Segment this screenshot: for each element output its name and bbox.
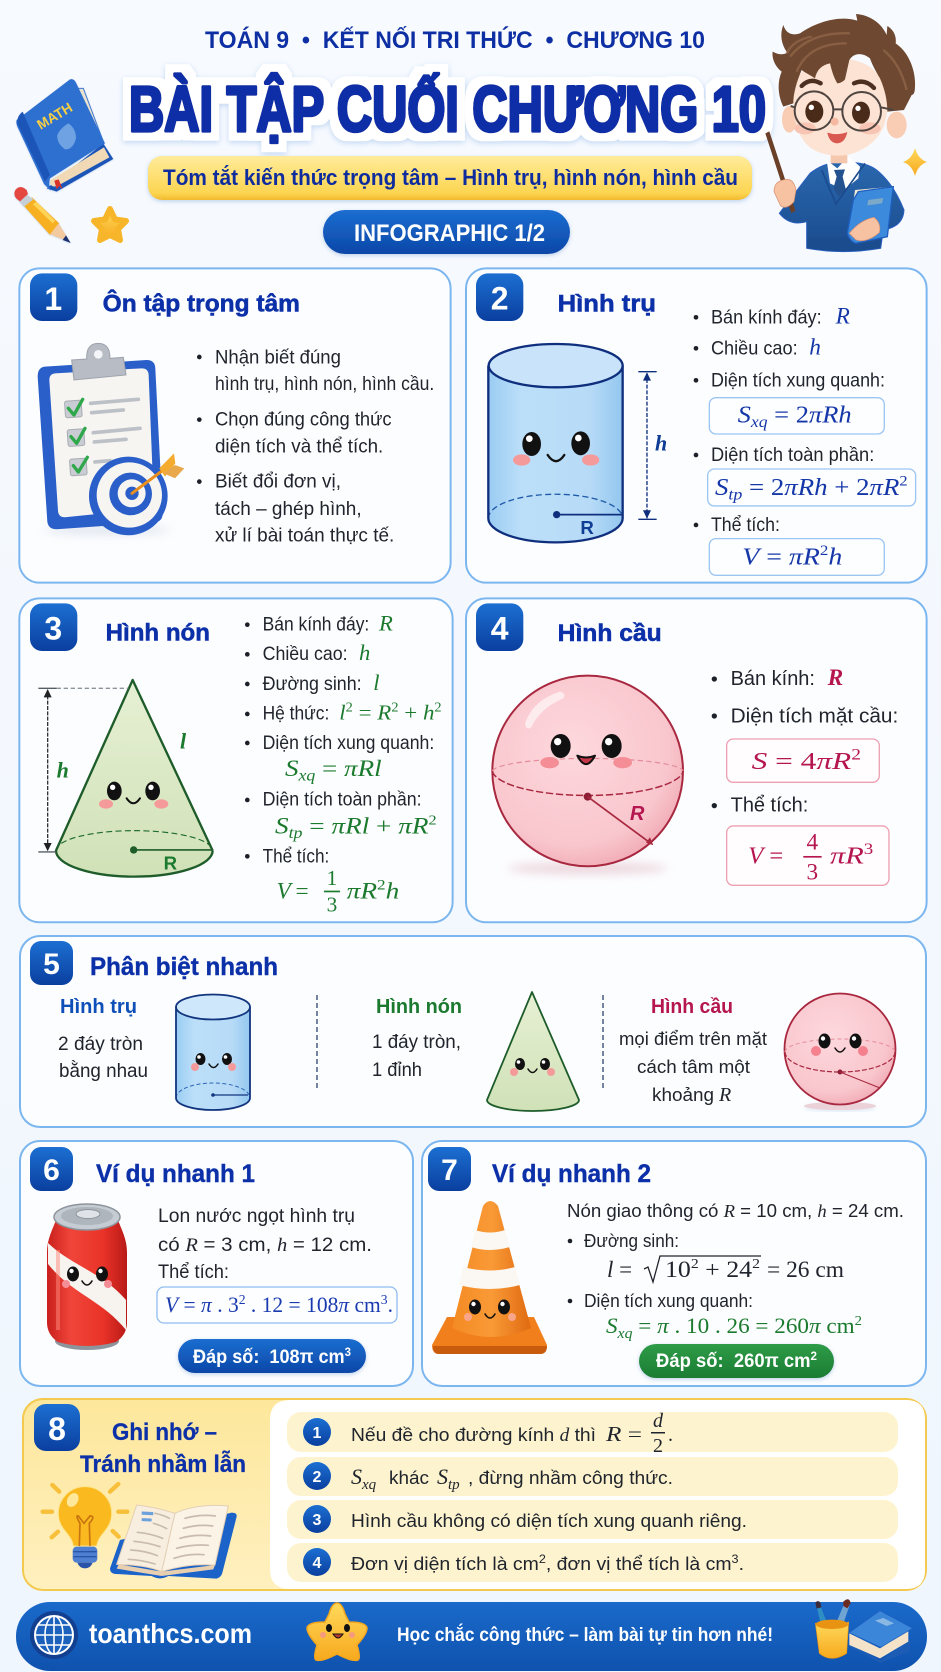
icon: globe <box>30 1611 78 1659</box>
bullet list: diện tích và thể tích. <box>215 435 383 457</box>
answer pill <box>639 1344 834 1378</box>
face <box>513 431 599 466</box>
formula box: . <box>388 1292 393 1317</box>
formula box Stp: 2 <box>899 474 908 490</box>
column: hinh tru: 2 đáy tròn <box>58 1034 143 1055</box>
icon: small cylinder <box>176 994 250 1110</box>
cylinder diagram <box>488 344 667 542</box>
formula list: 2 <box>346 699 353 714</box>
badge 7: 7 <box>441 1154 458 1187</box>
badge 7 <box>428 1147 471 1191</box>
icon: traffic cone <box>432 1201 547 1354</box>
heading: Phân biệt nhanh <box>90 953 278 981</box>
footer bar <box>16 1599 927 1671</box>
formula box S <box>727 739 879 782</box>
heading: Hình nón <box>106 620 210 647</box>
column: hinh cau: khoảng <box>652 1084 714 1105</box>
subtitle: course line: TOÁN 9 • KẾT NỐI TRI THỨC • CHƯƠNG 10 <box>205 26 705 54</box>
worked example: π . 10 . 26 = 260 π cm <box>657 1313 853 1338</box>
formula box V: 2 <box>820 543 828 559</box>
formula box: 3 <box>381 1293 388 1308</box>
panel: ghi nho: Tránh nhầm lẫn <box>80 1450 246 1478</box>
formula list: S <box>285 756 297 782</box>
row 4: 3 <box>732 1552 739 1566</box>
slant label: l <box>180 728 187 753</box>
height arrow <box>638 372 667 519</box>
face <box>99 782 168 809</box>
column: hinh tru: bằng nhau <box>59 1060 148 1082</box>
icon: pencil cup and books <box>815 1599 913 1663</box>
icon: smiling star <box>307 1603 367 1660</box>
row 2: , đừng nhầm công thức. <box>468 1467 673 1488</box>
column: hinh non: 1 đáy tròn, <box>372 1032 461 1053</box>
formula box Sxq: xq <box>750 414 768 431</box>
row 1: R = <box>605 1422 642 1446</box>
column: hinh tru <box>58 994 250 1110</box>
icon: small sphere <box>784 994 896 1110</box>
badge 3 <box>30 603 77 651</box>
formula list: l <box>339 700 345 724</box>
icon: pencil <box>14 187 71 243</box>
formula box <box>157 1287 397 1323</box>
formula list: S <box>275 813 287 839</box>
formula V cone <box>277 866 399 917</box>
row 2: xq <box>361 1477 377 1493</box>
bullet list: hình trụ, hình nón, hình cầu. <box>215 374 434 395</box>
formula list: R <box>827 665 843 691</box>
row 4: 2 <box>539 1552 546 1566</box>
column: hinh non: Hình nón <box>376 996 462 1018</box>
formula list: Thể tích: <box>731 794 808 817</box>
worked example: xq <box>617 1326 633 1342</box>
character: boy teacher <box>765 14 915 252</box>
answer pill: Đáp số: 108π cm <box>193 1347 352 1368</box>
formula list: Bán kính đáy: <box>263 615 369 636</box>
column: hinh cau: mọi điểm trên mặt <box>619 1028 767 1049</box>
worked example: = 26 cm <box>767 1257 844 1282</box>
formula list: h <box>809 334 821 360</box>
formula box Sxq <box>709 398 884 434</box>
formula list: 2 <box>434 699 442 714</box>
formula list: tp <box>289 825 303 842</box>
formula list: l <box>373 670 380 695</box>
formula V cone: πR <box>347 878 373 904</box>
height arrow <box>38 688 128 852</box>
badge 8: 8 <box>48 1411 66 1447</box>
formula list: h <box>359 640 370 665</box>
heading: Ôn tập trọng tâm <box>103 290 300 318</box>
icon: math book <box>16 79 113 192</box>
row 3 <box>303 1505 747 1533</box>
formula list: Diện tích toàn phần: <box>263 790 422 811</box>
worked example: Diện tích xung quanh: <box>584 1291 753 1311</box>
formula list: πRl <box>344 756 376 782</box>
infographic pill <box>323 210 570 254</box>
formula list: = <box>315 756 344 782</box>
icon: sparkle <box>903 148 927 176</box>
formula list <box>245 611 442 917</box>
row 4 <box>303 1548 744 1576</box>
yellow banner <box>148 156 752 200</box>
formula list: R <box>835 303 850 329</box>
formula box V <box>727 826 889 885</box>
worked example: Đường sinh: <box>584 1231 679 1251</box>
formula box V: V = πR <box>742 544 816 570</box>
badge 4: 4 <box>491 610 509 646</box>
answer pill: Đáp số: 260π cm <box>656 1351 815 1372</box>
badge 5 <box>30 941 73 985</box>
badge 2: 2 <box>491 280 509 316</box>
column: hinh cau <box>619 994 896 1110</box>
formula box V: 3 <box>806 859 818 885</box>
formula box Stp: = 2 <box>742 475 784 501</box>
formula box Sxq: S <box>738 402 750 428</box>
worked example: 2 <box>855 1314 862 1329</box>
row 2: S <box>437 1464 448 1489</box>
icon: open book <box>110 1505 237 1579</box>
badge 6 <box>30 1147 73 1191</box>
panel: phan biet nhanh <box>20 936 926 1127</box>
badge 1 <box>30 273 77 321</box>
formula box Sxq: πRh <box>809 402 848 428</box>
formula box V: 3 <box>864 841 874 858</box>
row 2: khác <box>389 1467 429 1488</box>
heading: Ví dụ nhanh 2 <box>492 1160 651 1188</box>
formula box Stp: S <box>715 475 727 501</box>
formula list: R <box>377 700 390 724</box>
formula list: 2 <box>428 814 437 829</box>
formula list: Thể tích: <box>711 514 780 536</box>
problem text: Lon nước ngọt hình trụ <box>158 1206 355 1227</box>
icon: clipboard with target <box>38 343 184 535</box>
column: hinh non <box>372 992 579 1111</box>
badge 5: 5 <box>43 948 60 981</box>
infographic pill: INFOGRAPHIC 1/2 <box>354 220 545 247</box>
height arrow: h <box>655 431 667 456</box>
problem text: có R = 3 cm, h = 12 cm. <box>158 1235 372 1256</box>
panel: on tap trong tam <box>19 268 451 583</box>
answer pill <box>178 1339 366 1373</box>
formula box S: S = 4πR <box>752 748 844 775</box>
formula V cone: 2 <box>377 878 386 894</box>
formula list: Hệ thức: <box>263 703 329 724</box>
column: hinh tru: Hình trụ <box>60 996 137 1018</box>
formula V cone: 1 <box>327 866 337 890</box>
worked example: Nón giao thông có R = 10 cm, h = 24 cm. <box>567 1201 904 1221</box>
formula V cone: 3 <box>327 893 337 917</box>
radius arrow <box>584 793 653 845</box>
formula list: 2 <box>391 699 399 714</box>
column: hinh cau: cách tâm một <box>637 1056 750 1077</box>
row 4: Đơn vị diện tích là cm <box>351 1553 530 1574</box>
badge 6: 6 <box>43 1154 60 1187</box>
bullet list: Chọn đúng công thức <box>215 410 392 431</box>
formula list: Chiều cao: <box>263 644 348 665</box>
badge 1: 1 <box>44 281 62 317</box>
formula list: h <box>423 700 434 724</box>
formula list <box>712 665 898 885</box>
formula list: Diện tích mặt cầu: <box>731 704 898 727</box>
worked example: 10 <box>665 1257 688 1282</box>
heading: Hình cầu <box>558 620 662 647</box>
row 1: 2 <box>653 1435 663 1457</box>
bullet list: tách – ghép hình, <box>215 499 362 520</box>
formula box Sxq: = 2 <box>768 402 809 428</box>
worked example: 2 <box>752 1257 760 1272</box>
formula V cone: V= <box>277 878 309 904</box>
icon: small cone <box>487 992 579 1111</box>
formula list: Bán kính đáy: <box>711 307 822 328</box>
row 1 <box>303 1410 673 1457</box>
column: hinh non: 1 đỉnh <box>372 1060 422 1081</box>
radius arrow: R <box>630 803 645 825</box>
worked example <box>567 1201 904 1342</box>
row 1: Nếu đề cho đường kính d thì <box>351 1424 596 1446</box>
row 1: d <box>653 1410 664 1432</box>
radius <box>553 511 622 538</box>
formula box S: 2 <box>851 747 861 764</box>
panel: vi du 2 <box>422 1141 926 1386</box>
formula list: Thể tích: <box>263 846 329 867</box>
panel: hinh non <box>19 598 453 922</box>
icon: soda can <box>47 1204 127 1350</box>
formula list: R <box>378 611 393 636</box>
formula box: 2 <box>239 1293 246 1308</box>
website: toanthcs.com <box>89 1618 252 1649</box>
row 2: S <box>351 1464 362 1489</box>
icon: light bulb <box>43 1484 127 1568</box>
badge 8 <box>34 1404 80 1451</box>
formula list: Đường sinh: <box>263 674 362 695</box>
formula list: + <box>399 700 423 724</box>
formula box V: 4 <box>806 829 818 855</box>
panel: ghi nho <box>23 1399 926 1590</box>
icon: gold star <box>94 209 126 240</box>
heading: Ví dụ nhanh 1 <box>96 1160 255 1188</box>
formula box V <box>709 539 884 575</box>
row 3: 3 <box>313 1512 322 1529</box>
row 4: . <box>739 1553 744 1574</box>
row 3: Hình cầu không có diện tích xung quanh riêng. <box>351 1510 747 1531</box>
formula box Stp: πRh + 2πR <box>784 475 896 501</box>
formula box: π cm <box>338 1292 382 1317</box>
reminder rows <box>287 1410 898 1582</box>
worked example: + 24 <box>699 1257 753 1282</box>
cone diagram <box>38 680 213 877</box>
worked example: = <box>632 1313 657 1338</box>
formula list: Diện tích xung quanh: <box>711 371 885 392</box>
formula V cone: h <box>386 878 399 904</box>
bullet list: xử lí bài toán thực tế. <box>215 526 394 547</box>
badge 2 <box>476 273 523 321</box>
formula list: = <box>303 813 331 839</box>
radius <box>130 846 213 873</box>
panel: hinh cau <box>466 598 927 922</box>
formula box V: h <box>828 544 842 570</box>
column: hinh cau: R <box>718 1084 731 1106</box>
formula list: Diện tích toàn phần: <box>711 445 874 466</box>
formula box V: πR <box>830 842 857 869</box>
sphere diagram <box>492 676 683 874</box>
header <box>14 14 927 254</box>
panel: vi du 1 <box>20 1141 413 1386</box>
heading: Hình trụ <box>558 291 656 318</box>
formula list: Diện tích xung quanh: <box>263 733 434 754</box>
formula box Stp: tp <box>728 487 742 504</box>
row 1: 1 <box>313 1425 322 1442</box>
problem text: Thể tích: <box>158 1262 229 1283</box>
formula list: xq <box>297 768 316 785</box>
height arrow: h <box>57 757 69 782</box>
worked example: l = <box>607 1257 632 1282</box>
formula box: V = π . 3 <box>165 1292 239 1317</box>
problem text <box>158 1206 372 1283</box>
heading: Ghi nhớ – <box>112 1419 217 1446</box>
row 4: , đơn vị thể tích là cm <box>546 1553 732 1574</box>
main title: BÀI TẬP CUỐI CHƯƠNG 10 <box>129 72 766 145</box>
formula list: = <box>353 700 377 724</box>
worked example: S <box>606 1313 617 1338</box>
bullet list: Nhận biết đúng <box>215 347 341 368</box>
row 2 <box>303 1462 673 1493</box>
row 2: tp <box>448 1477 460 1493</box>
formula box V: V= <box>748 842 783 869</box>
column: hinh cau: Hình cầu <box>651 996 733 1018</box>
formula box Stp <box>708 469 916 506</box>
yellow banner: Tóm tắt kiến thức trọng tâm – Hình trụ, hình nón, hình cầu <box>163 165 738 190</box>
panel: hinh tru <box>466 268 927 583</box>
row 1: . <box>668 1424 673 1446</box>
row 4: 4 <box>313 1555 322 1572</box>
answer pill: 3 <box>345 1345 351 1359</box>
answer pill: 2 <box>811 1349 817 1363</box>
radius: R <box>164 852 178 873</box>
badge 3: 3 <box>44 610 62 646</box>
bullet list <box>197 347 434 547</box>
face <box>540 734 632 768</box>
formula list: Bán kính: <box>731 667 815 690</box>
badge 4 <box>476 603 523 651</box>
formula list: Chiều cao: <box>711 338 798 359</box>
formula box: . 12 = 108 <box>246 1292 338 1317</box>
worked example: 2 <box>691 1257 699 1272</box>
formula list <box>694 303 916 575</box>
slogan: Học chắc công thức – làm bài tự tin hơn nhé! <box>397 1624 773 1646</box>
radius: R <box>580 517 594 538</box>
bullet list: Biết đổi đơn vị, <box>215 471 341 493</box>
formula list: πRl + πR <box>331 813 424 839</box>
row 2: 2 <box>313 1469 322 1486</box>
icon: math book: MATH <box>34 99 75 133</box>
